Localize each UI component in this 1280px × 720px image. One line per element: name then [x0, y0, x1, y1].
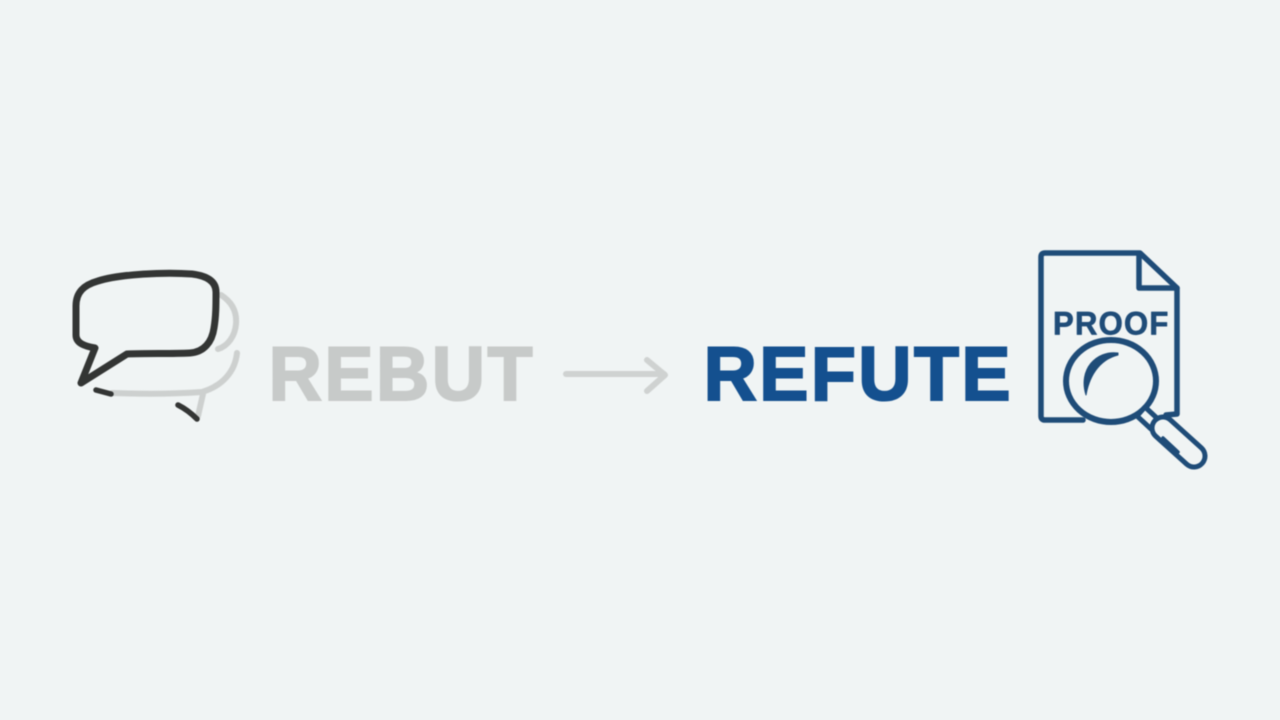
- back speech bubble in grey: [112, 295, 237, 416]
- document outline: [1041, 253, 1177, 420]
- label: PROOF: PROOF: [1053, 305, 1170, 342]
- magnifying glass: [1066, 340, 1194, 456]
- icon: proof document with magnifying glass: [1041, 253, 1194, 456]
- word: REFUTE: REFUTE: [704, 331, 1013, 416]
- lens highlight: [1084, 353, 1118, 395]
- lens: [1066, 340, 1156, 422]
- icon: fading speech bubbles: [76, 273, 237, 419]
- front speech bubble in dark: [76, 273, 216, 383]
- arrow: [566, 360, 665, 391]
- handle inner line: [1163, 438, 1178, 452]
- handle inner: [1163, 428, 1194, 456]
- document folded corner: [1139, 255, 1177, 288]
- word: REBUT: REBUT: [269, 331, 535, 416]
- neck: [1137, 407, 1159, 429]
- fragments of back bubble in dark: [96, 390, 197, 419]
- handle: [1163, 428, 1194, 456]
